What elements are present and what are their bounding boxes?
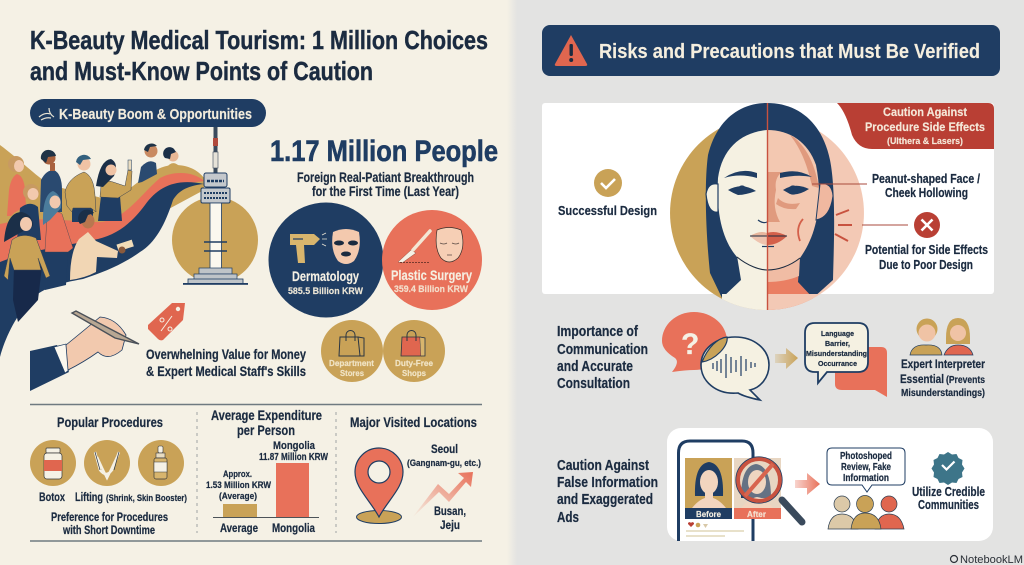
title: and Must-Know Points of Caution	[30, 56, 373, 86]
flowing waves	[0, 145, 204, 357]
title: K-Beauty Medical Tourism: 1 Million Choices	[30, 25, 488, 55]
icon: X badge	[914, 212, 940, 238]
icon: group of reviewers	[828, 496, 904, 529]
panel: average expenditure chart: (Average)	[219, 491, 257, 502]
circle: plastic surgery: Plastic Surgery	[391, 268, 472, 283]
icon: warning triangle	[555, 35, 587, 66]
circle: plastic surgery	[382, 210, 482, 310]
heading: false information: Caution Against	[557, 458, 649, 474]
panel: average expenditure chart: Mongolia	[272, 521, 315, 535]
circle: department stores	[321, 320, 383, 382]
label: side effects	[865, 243, 988, 272]
label: side effects: Potential for Side Effects	[865, 243, 988, 257]
panel: popular procedures: Preference for Procedures	[51, 512, 168, 524]
label: expert interpreter: Misunderstandings)	[901, 388, 985, 399]
person: man in navy, rear	[138, 144, 158, 183]
circle: duty-free shops	[383, 320, 445, 382]
arrow: gold	[775, 348, 798, 369]
banner: caution against side effects: (Ulthera & Lasers)	[887, 136, 963, 147]
heading: communication: Consultation	[557, 376, 630, 392]
bubble: photoshoped review: Review, Fake	[841, 462, 891, 473]
big number: 1.17 Million People: 1.17 Million People	[270, 135, 498, 168]
circle: dermatology	[268, 202, 384, 318]
section heading pill: K-Beauty Boom: K-Beauty Boom & Opportunities	[59, 106, 252, 123]
panel: major visited locations: Seoul	[431, 442, 458, 456]
bubble: photoshoped review	[827, 448, 905, 492]
panel: popular procedures: with Short Downtime	[62, 525, 155, 537]
heading: false information: False Information	[557, 475, 658, 491]
heading: false information	[557, 458, 658, 526]
heading: communication	[557, 324, 648, 392]
icon: interpreters	[910, 318, 973, 355]
label: peanut-shaped face	[872, 172, 980, 200]
icon: orange shopping bag	[401, 330, 425, 356]
label: expert interpreter	[900, 357, 985, 399]
icon: speech bubbles with waveform: ?	[681, 328, 699, 361]
panel: popular procedures: (Shrink, Skin Booster)	[106, 493, 187, 504]
label: peanut-shaped face: Cheek Hollowing	[885, 186, 968, 200]
person: woman in orange	[7, 156, 26, 216]
big number: 1.17 Million People: for the First Time (Last Year)	[312, 184, 459, 199]
banner: caution against side effects: Caution Against	[883, 105, 967, 119]
panel: major visited locations: Major Visited Locations	[350, 415, 477, 430]
panel: major visited locations: Busan,	[434, 504, 466, 518]
icon: speech bubbles with waveform	[662, 312, 769, 400]
person: woman in orange with blue hair	[43, 191, 73, 290]
bar: average	[223, 504, 257, 517]
header bar: risks and precautions	[542, 25, 1000, 76]
person: navy shirt blond hair	[17, 184, 41, 240]
circle: dermatology: Dermatology	[292, 269, 359, 284]
red burst marks	[835, 210, 852, 241]
label: expert interpreter: (Prevents	[946, 375, 985, 386]
circle: department stores: Stores	[340, 368, 364, 378]
circle: plastic surgery: 359.4 Billion KRW	[394, 284, 468, 295]
ears	[706, 184, 833, 220]
arrow: growth zigzag	[412, 472, 473, 518]
heading: communication: Importance of	[557, 324, 638, 340]
person: woman rear	[163, 147, 179, 168]
label: utilize credible communities: Utilize Credible	[912, 485, 985, 499]
circle: duty-free shops: Duty-Free	[395, 358, 433, 368]
icon: verified badge	[932, 452, 964, 485]
label: utilize credible communities	[912, 485, 985, 512]
icon: language barrier bubbles: Occurrance	[818, 359, 857, 368]
panel: major visited locations: (Gangnam-gu, etc.)	[407, 458, 481, 468]
icon: face mask	[332, 229, 360, 264]
panel: average expenditure chart: per Person	[237, 423, 295, 438]
icon: scalpel	[398, 231, 430, 263]
panel: average expenditure chart: Average Expenditure	[211, 408, 322, 423]
panel: face comparison	[542, 103, 994, 312]
left face half	[718, 130, 767, 270]
label: before: Before	[696, 509, 721, 519]
bubble: photoshoped review: Photoshoped	[840, 451, 892, 462]
centre dividing line	[766, 103, 768, 310]
panel: popular procedures: Botox	[39, 490, 65, 504]
panel: average expenditure chart: 1.53 Million KRW	[206, 480, 271, 491]
panel: major visited locations: Jeju	[440, 518, 460, 532]
banner: caution against side effects: Procedure Side Effects	[865, 120, 985, 134]
banner: caution against side effects	[837, 103, 994, 149]
title	[30, 25, 488, 86]
label: successful design: Successful Design	[558, 203, 657, 218]
icon: map pin	[355, 448, 403, 524]
icon: prohibited magnifier	[736, 457, 802, 522]
right face half	[767, 130, 819, 270]
big number: 1.17 Million People	[270, 135, 498, 199]
circle background halves	[670, 116, 864, 310]
icon: lifting arrows	[84, 440, 130, 486]
icon: phone with before and after	[678, 441, 781, 545]
icon: check badge	[594, 169, 622, 197]
label: expert interpreter: Expert Interpreter	[901, 357, 985, 371]
person: woman with phone	[96, 159, 132, 221]
icon: Seoul tower	[172, 127, 258, 285]
icon: hand holding pen	[30, 311, 139, 391]
panel: popular procedures	[30, 415, 187, 537]
person: man in navy	[40, 150, 62, 212]
header bar: risks and precautions: Risks and Precautions that Must Be Verified	[599, 41, 980, 63]
icon: serum dropper	[138, 440, 184, 486]
panel: false ads	[667, 428, 993, 545]
value text: Overwhelning Value for Money	[146, 347, 306, 362]
heading: false information: and Exaggerated	[557, 492, 653, 508]
before portrait	[685, 458, 732, 508]
panel: average expenditure chart: Approx.	[223, 469, 252, 480]
skin damage shading	[767, 135, 819, 222]
icon: language barrier bubbles: Language	[821, 329, 854, 338]
after portrait	[734, 458, 781, 508]
value text	[146, 347, 306, 379]
icon: language barrier bubbles: Misunderstanding	[806, 349, 867, 358]
icon: language barrier bubbles	[805, 323, 887, 397]
crowd of travellers	[4, 144, 179, 322]
hair	[706, 103, 834, 298]
icon: laser device	[290, 233, 327, 263]
arrow: orange	[795, 473, 820, 495]
facial features	[724, 171, 812, 246]
lower circle overflow	[722, 294, 818, 310]
panel: popular procedures: Lifting	[75, 490, 103, 504]
label: side effects: Due to Poor Design	[879, 258, 973, 272]
icon: botox bottle	[30, 440, 76, 486]
heading: false information: Ads	[557, 510, 579, 526]
value text: & Expert Medical Staff's Skills	[146, 364, 306, 379]
circle: duty-free shops: Shops	[402, 368, 426, 378]
person: woman in gold, front	[4, 212, 50, 322]
label: utilize credible communities: Communities	[918, 498, 979, 512]
icon: discount tag	[148, 303, 185, 340]
label: peanut-shaped face: Peanut-shaped Face /	[872, 172, 980, 186]
bubble: photoshoped review: Information	[843, 473, 889, 484]
icon: shopping bag outline	[339, 330, 364, 356]
panel: major visited locations	[350, 415, 481, 532]
panel: average expenditure chart: Average	[220, 521, 258, 535]
big number: 1.17 Million People: Foreign Real-Patiant Breakthrough	[297, 170, 474, 185]
panel: average expenditure chart: 11.87 Million KRW	[259, 452, 328, 463]
panel: average expenditure chart	[206, 408, 328, 535]
label: expert interpreter: Essential	[900, 372, 944, 386]
neck	[722, 256, 813, 312]
person: man in gold	[65, 155, 96, 222]
panel: average expenditure chart: Mongolia	[273, 440, 316, 452]
person: man in cream with ticket	[70, 210, 134, 280]
circle: department stores: Department	[329, 358, 374, 368]
icon: language barrier bubbles: Barrier,	[825, 339, 850, 348]
section heading pill: K-Beauty Boom	[30, 99, 266, 127]
icon: serene face	[436, 228, 463, 262]
label: after: After	[747, 509, 767, 519]
bar: Mongolia	[276, 463, 309, 517]
heading: communication: Communication	[557, 342, 648, 358]
panel: popular procedures: Popular Procedures	[57, 415, 163, 430]
heading: communication: and Accurate	[557, 359, 633, 375]
circle: dermatology: 585.5 Billion KRW	[288, 286, 363, 297]
